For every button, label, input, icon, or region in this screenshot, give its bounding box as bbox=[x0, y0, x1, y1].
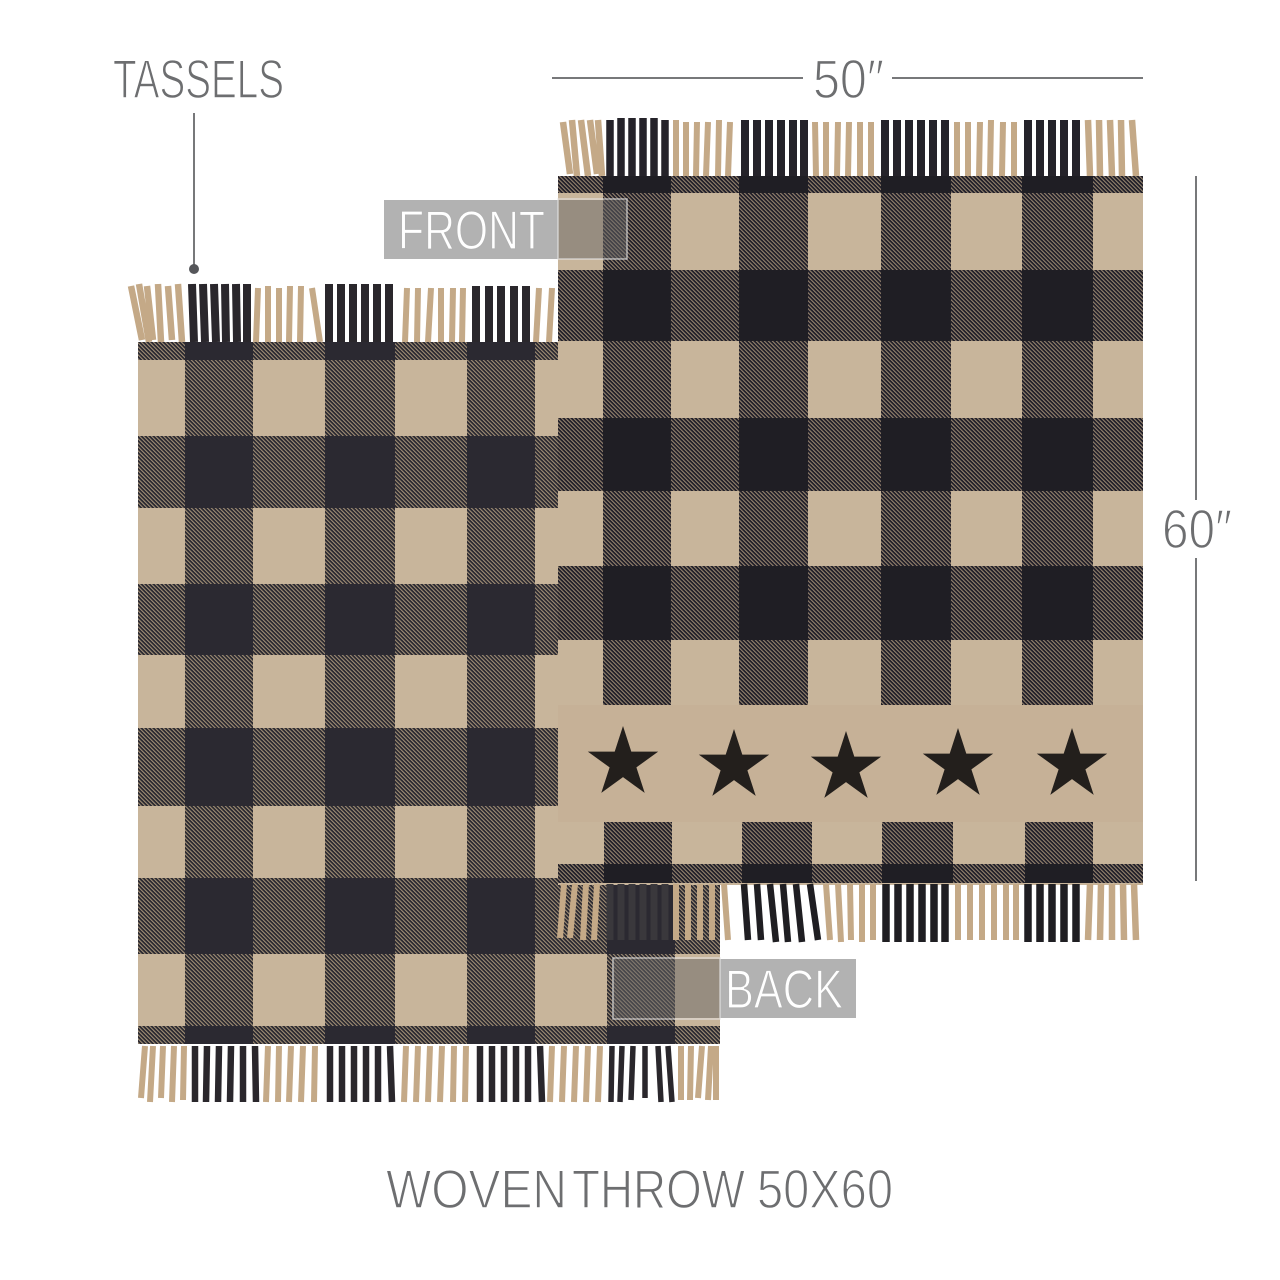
dimension: height 60 inches: 60″ bbox=[1162, 498, 1232, 560]
front throw fabric bbox=[558, 176, 1143, 885]
label: tassels with leader: TASSELS bbox=[113, 48, 284, 110]
star 1 bbox=[588, 726, 658, 793]
back throw bbox=[131, 284, 720, 1102]
front throw bbox=[558, 118, 1143, 942]
front throw top tassels bbox=[563, 118, 1136, 176]
star row bbox=[588, 726, 1107, 798]
label: back bbox=[612, 958, 856, 1020]
back throw bottom tassels bbox=[141, 1046, 716, 1102]
star 3 bbox=[811, 731, 881, 798]
product title: WOVEN bbox=[386, 1158, 567, 1220]
label: front: FRONT bbox=[398, 199, 545, 261]
product title: THROW bbox=[572, 1158, 745, 1220]
label: back: BACK bbox=[725, 958, 843, 1020]
back throw fabric bbox=[138, 342, 720, 1044]
product title: 50X60 bbox=[757, 1158, 893, 1220]
star 5 bbox=[1037, 728, 1107, 795]
star 2 bbox=[699, 729, 769, 796]
dimension: width 50 inches: 50″ bbox=[813, 48, 884, 110]
star 4 bbox=[923, 728, 993, 795]
front throw bottom tassels bbox=[560, 884, 1136, 942]
product title bbox=[386, 1158, 893, 1220]
label: tassels with leader bbox=[113, 48, 284, 274]
back throw top tassels bbox=[131, 284, 552, 342]
